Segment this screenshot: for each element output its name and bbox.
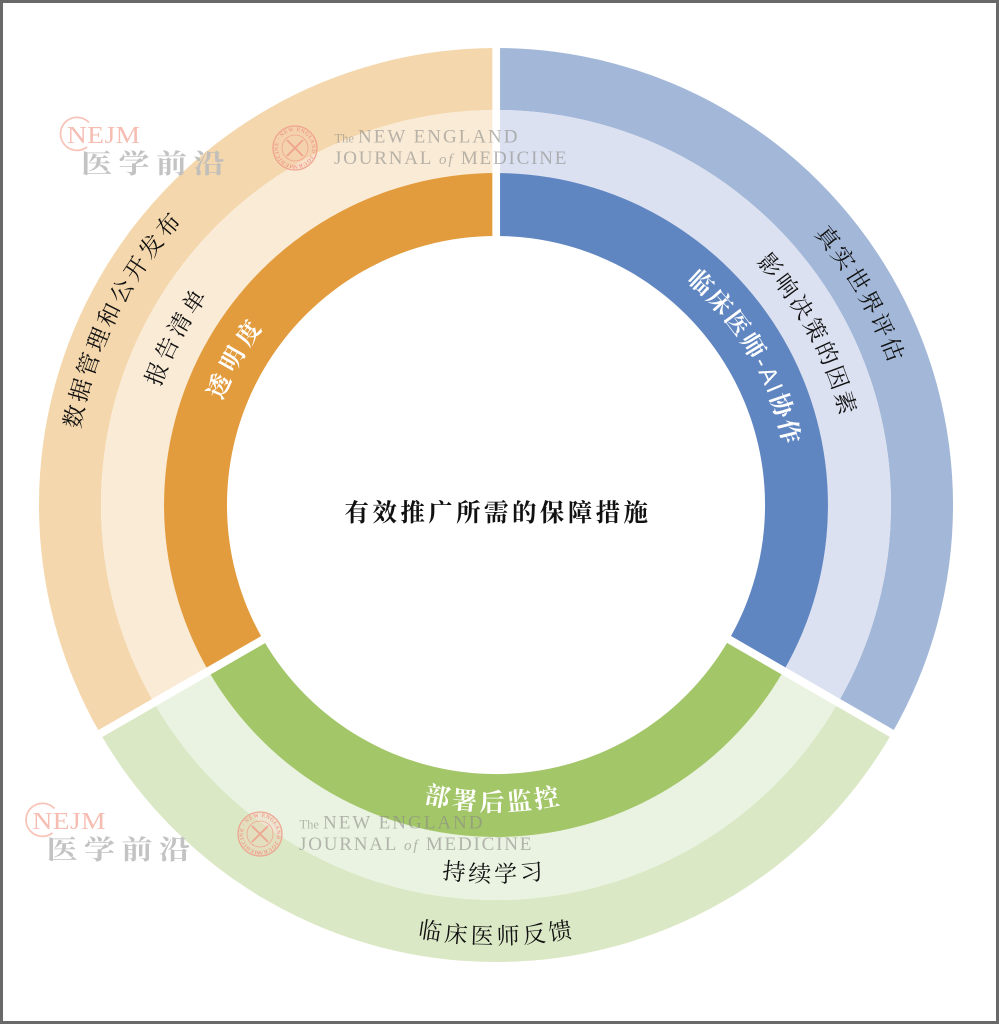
icon: NEJM arc — [61, 117, 89, 150]
labels: orange sector — [62, 212, 262, 428]
医学前沿 wordmark: 医学前沿 — [46, 835, 196, 865]
label: clinician-AI collaboration: 临床医师-AI协作 — [688, 268, 801, 443]
journal name: JOURNAL of MEDICINE — [334, 148, 568, 169]
label: data management: 数据管理和公开发布 — [62, 212, 179, 428]
watermark: NEJM seal and journal name top — [272, 125, 568, 171]
band: clinician-AI collaboration — [496, 173, 828, 671]
band: post-deployment monitoring — [208, 640, 784, 837]
panel: post-deployment monitoring (green) — [100, 640, 892, 962]
centre heading: 有效推广所需的保障措施 — [345, 498, 651, 527]
labels: green sector — [420, 782, 572, 946]
band: decision factors — [496, 110, 891, 702]
journal name: NEW ENGLAND — [358, 126, 520, 148]
panel: transparency (orange) — [39, 48, 496, 734]
label: post-deployment monitoring: 部署后监控 — [426, 782, 560, 814]
label: decision factors: 影响决策的因素 — [756, 252, 858, 414]
label: reporting checklist: 报告清单 — [143, 290, 204, 386]
band: continuous learning — [154, 671, 838, 900]
label: real-world evaluation: 真实世界评估 — [814, 224, 904, 360]
icon: seal — [272, 125, 318, 171]
journal name: NEW ENGLAND — [323, 812, 484, 834]
journal name: JOURNAL of MEDICINE — [299, 834, 533, 855]
NEJM wordmark: NEJM — [32, 807, 106, 835]
watermark: NEJM seal and journal name bottom — [237, 811, 533, 857]
journal name — [334, 126, 568, 169]
icon: seal: MEDICINE · NEW ENGLAND JOURNAL — [274, 128, 316, 169]
band: data management and public release — [39, 48, 496, 734]
journal name: The — [334, 132, 354, 146]
band: transparency — [164, 173, 496, 671]
panel: clinician collaboration (blue) — [496, 48, 953, 734]
watermark: NEJM 医学前沿 bottom — [26, 803, 196, 865]
band: clinician feedback — [100, 702, 892, 962]
journal name — [299, 812, 533, 855]
label: continuous learning: 持续学习 — [443, 860, 540, 884]
label: transparency: 透明度 — [204, 319, 262, 400]
icon: NEJM arc — [26, 803, 54, 836]
label: clinician feedback: 临床医师反馈 — [420, 919, 572, 946]
labels: blue sector — [688, 224, 904, 443]
journal name: The — [300, 818, 319, 832]
watermark: NEJM 医学前沿 top — [61, 117, 231, 179]
医学前沿 wordmark: 医学前沿 — [81, 149, 231, 179]
band: real-world evaluation — [496, 48, 953, 734]
band: reporting checklist — [101, 110, 496, 702]
NEJM wordmark: NEJM — [67, 121, 140, 149]
